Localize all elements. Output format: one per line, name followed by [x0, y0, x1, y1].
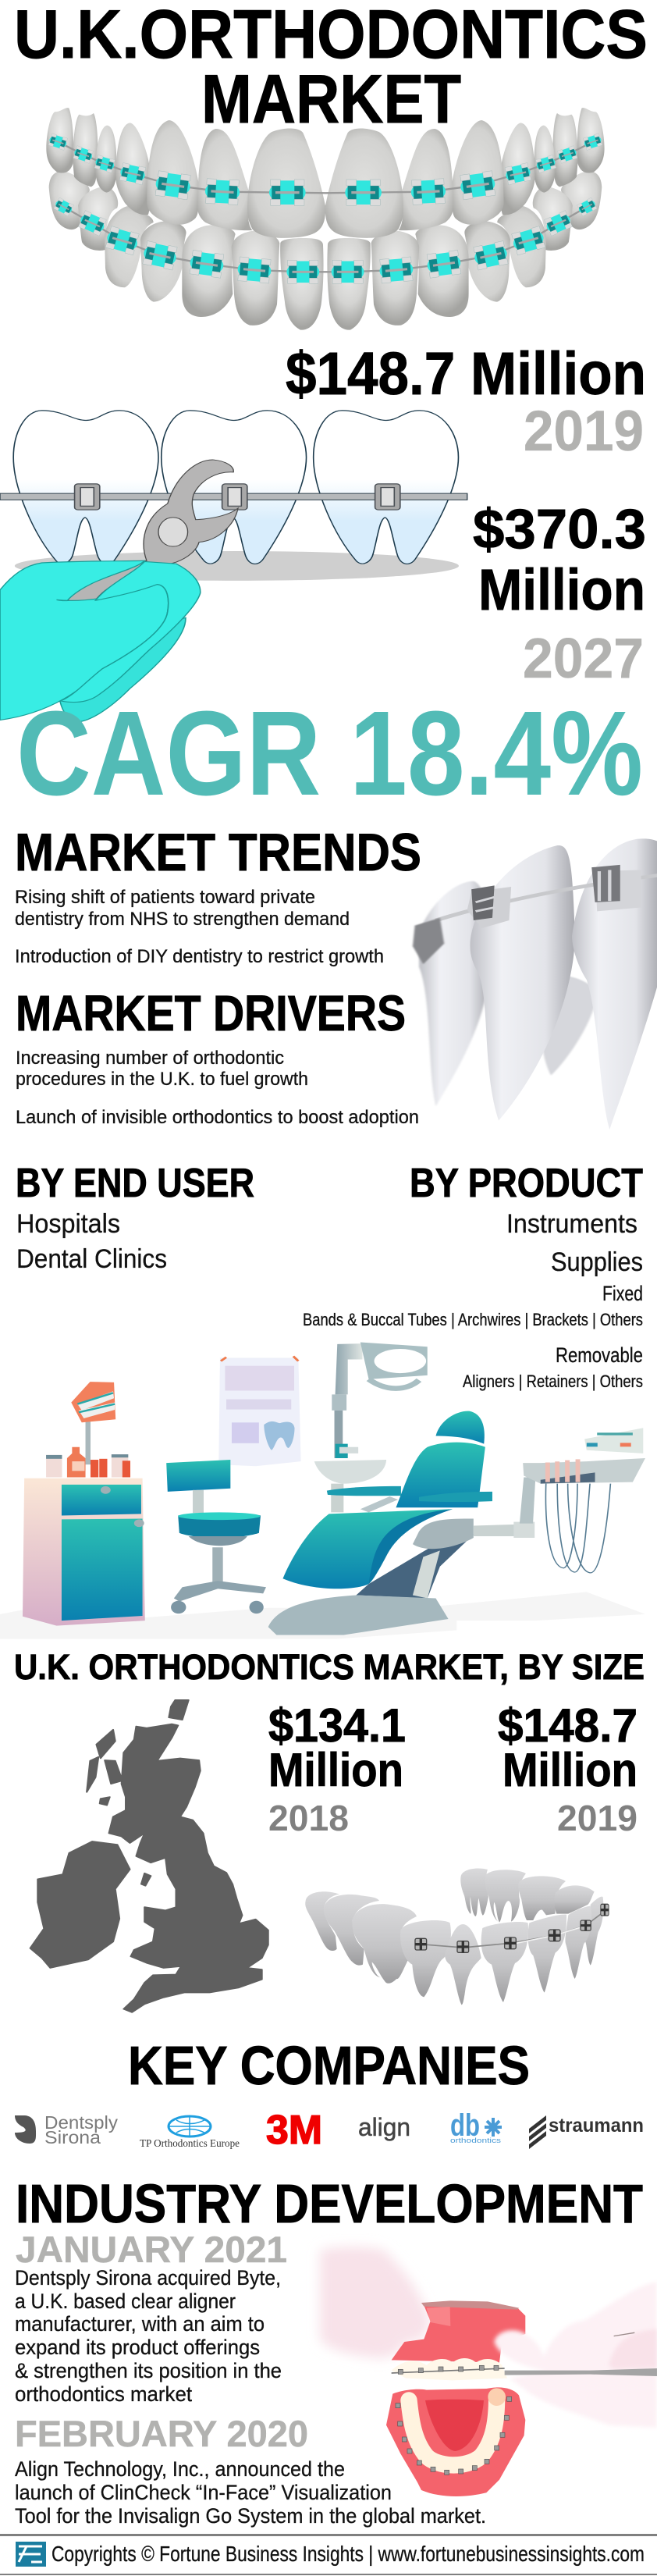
- trend text: [15, 887, 384, 967]
- stat: 2027 market size: $370.3: [473, 499, 646, 560]
- logo: Dentsply Sirona: [15, 2112, 119, 2147]
- panel: by product: [303, 1161, 643, 1391]
- teeth model on stand: [71, 1382, 115, 1464]
- stool: [166, 1460, 266, 1614]
- panel: February 2020 development: launch of ClinCheck “In-Face” Visualization: [15, 2481, 392, 2504]
- panel: January 2021 development: a U.K. based clear aligner: [15, 2290, 236, 2313]
- right glove: [494, 2282, 657, 2428]
- driver text: Launch of invisible orthodontics to boost adoption: [16, 1107, 419, 1128]
- panel: by end user: Dental Clinics: [16, 1244, 167, 1274]
- stat: 2018 size: Million: [268, 1744, 403, 1796]
- stat: 2019 size: Million: [503, 1744, 637, 1796]
- logo: straumann: [529, 2115, 644, 2149]
- logo: straumann: straumann: [549, 2115, 644, 2137]
- logo: TP Orthodontics Europe: [140, 2116, 240, 2150]
- stat: 2027 market size: [473, 499, 646, 690]
- illustration: gloved hand adjusting braces: [0, 411, 467, 722]
- photo: gloved hands holding dental model: [320, 2247, 657, 2496]
- icon: Fortune Business Insights logo: [16, 2542, 46, 2567]
- driver text: [16, 1048, 419, 1128]
- instrument: [505, 2368, 657, 2376]
- panel: by product: Fixed: [602, 1282, 643, 1305]
- driver text: Increasing number of orthodontic: [16, 1048, 284, 1069]
- logo: Dentsply Sirona: Dentsply: [44, 2112, 119, 2133]
- panel: January 2021 development: orthodontics market: [15, 2382, 192, 2406]
- panel: February 2020 development: Align Technology, Inc., announced the: [15, 2457, 345, 2481]
- stat: 2027 market size: Million: [478, 557, 645, 622]
- heading: market trends: MARKET TRENDS: [15, 823, 421, 882]
- panel: market drivers: [16, 985, 419, 1128]
- panel: by product: Instruments: [506, 1209, 637, 1239]
- footer: [16, 2542, 645, 2567]
- left glove: [320, 2247, 429, 2358]
- panel: January 2021 development: Dentsply Sirona acquired Byte,: [15, 2266, 281, 2290]
- illustration: teeth with teal braces: [46, 108, 605, 330]
- stat: 2019 size: [498, 1699, 637, 1838]
- logo: 3M: 3M: [266, 2108, 322, 2153]
- stat: 2018 size: $134.1: [268, 1699, 406, 1752]
- logo: db orthodontics: orthodontics: [450, 2137, 502, 2144]
- panel: January 2021 development: expand its product offerings: [15, 2336, 260, 2359]
- panel: January 2021 development: [15, 2229, 287, 2406]
- panel: by end user: BY END USER: [16, 1161, 254, 1206]
- trend text: dentistry from NHS to strengthen demand: [15, 909, 350, 930]
- cabinet: [23, 1478, 145, 1626]
- panel: by end user: [16, 1161, 254, 1274]
- panel: by product: Supplies: [551, 1247, 643, 1277]
- stat: 2019 market size: 2019: [524, 400, 644, 463]
- panel: January 2021 development: JANUARY 2021: [16, 2229, 287, 2270]
- panel: January 2021 development: manufacturer, with an aim to: [15, 2312, 265, 2336]
- stat: 2019 market size: [286, 340, 646, 463]
- photo: three teeth with metal braces: [413, 838, 657, 1130]
- dental chair: [268, 1411, 492, 1635]
- stat: 2018 size: 2018: [268, 1798, 349, 1838]
- logo: db orthodontics: db: [450, 2108, 480, 2143]
- panel: by end user: Hospitals: [16, 1209, 120, 1239]
- lamp and sink: [314, 1342, 428, 1512]
- logo: align: align: [358, 2113, 410, 2141]
- panel: February 2020 development: FEBRUARY 2020: [15, 2413, 308, 2454]
- logo: Dentsply Sirona: Sirona: [44, 2127, 101, 2147]
- upper jaw model: [392, 2300, 525, 2380]
- bottles on cabinet: [46, 1447, 130, 1477]
- driver text: procedures in the U.K. to fuel growth: [16, 1069, 308, 1090]
- photo: arch of teeth with braces: [305, 1868, 609, 2005]
- panel: market trends: [15, 823, 421, 967]
- title: MARKET: [201, 60, 461, 137]
- logo: TP Orthodontics Europe: TP Orthodontics Europe: [140, 2138, 240, 2150]
- heading: market drivers: MARKET DRIVERS: [16, 985, 406, 1041]
- company logos: [15, 2108, 644, 2153]
- wall poster: [218, 1356, 301, 1466]
- stat: 2018 size: [268, 1699, 406, 1838]
- lower jaw model: [386, 2387, 525, 2496]
- illustration: dental clinic: [0, 1342, 645, 1639]
- stat: 2019 size: 2019: [557, 1798, 637, 1838]
- title: [14, 0, 648, 137]
- stat: 2019 size: $148.7: [498, 1699, 637, 1752]
- delivery unit with handpieces: [474, 1428, 645, 1573]
- heading: key companies: KEY COMPANIES: [128, 2035, 530, 2096]
- map: UK and Ireland: [30, 1700, 268, 2012]
- trend text: Introduction of DIY dentistry to restrict growth: [15, 946, 384, 967]
- panel: February 2020 development: [15, 2413, 486, 2528]
- panel: February 2020 development: Tool for the Invisalign Go System in the global market.: [15, 2504, 486, 2528]
- panel: January 2021 development: & strengthen its position in the: [15, 2359, 282, 2382]
- stat: 2027 market size: 2027: [523, 628, 644, 690]
- trend text: Rising shift of patients toward private: [15, 887, 315, 908]
